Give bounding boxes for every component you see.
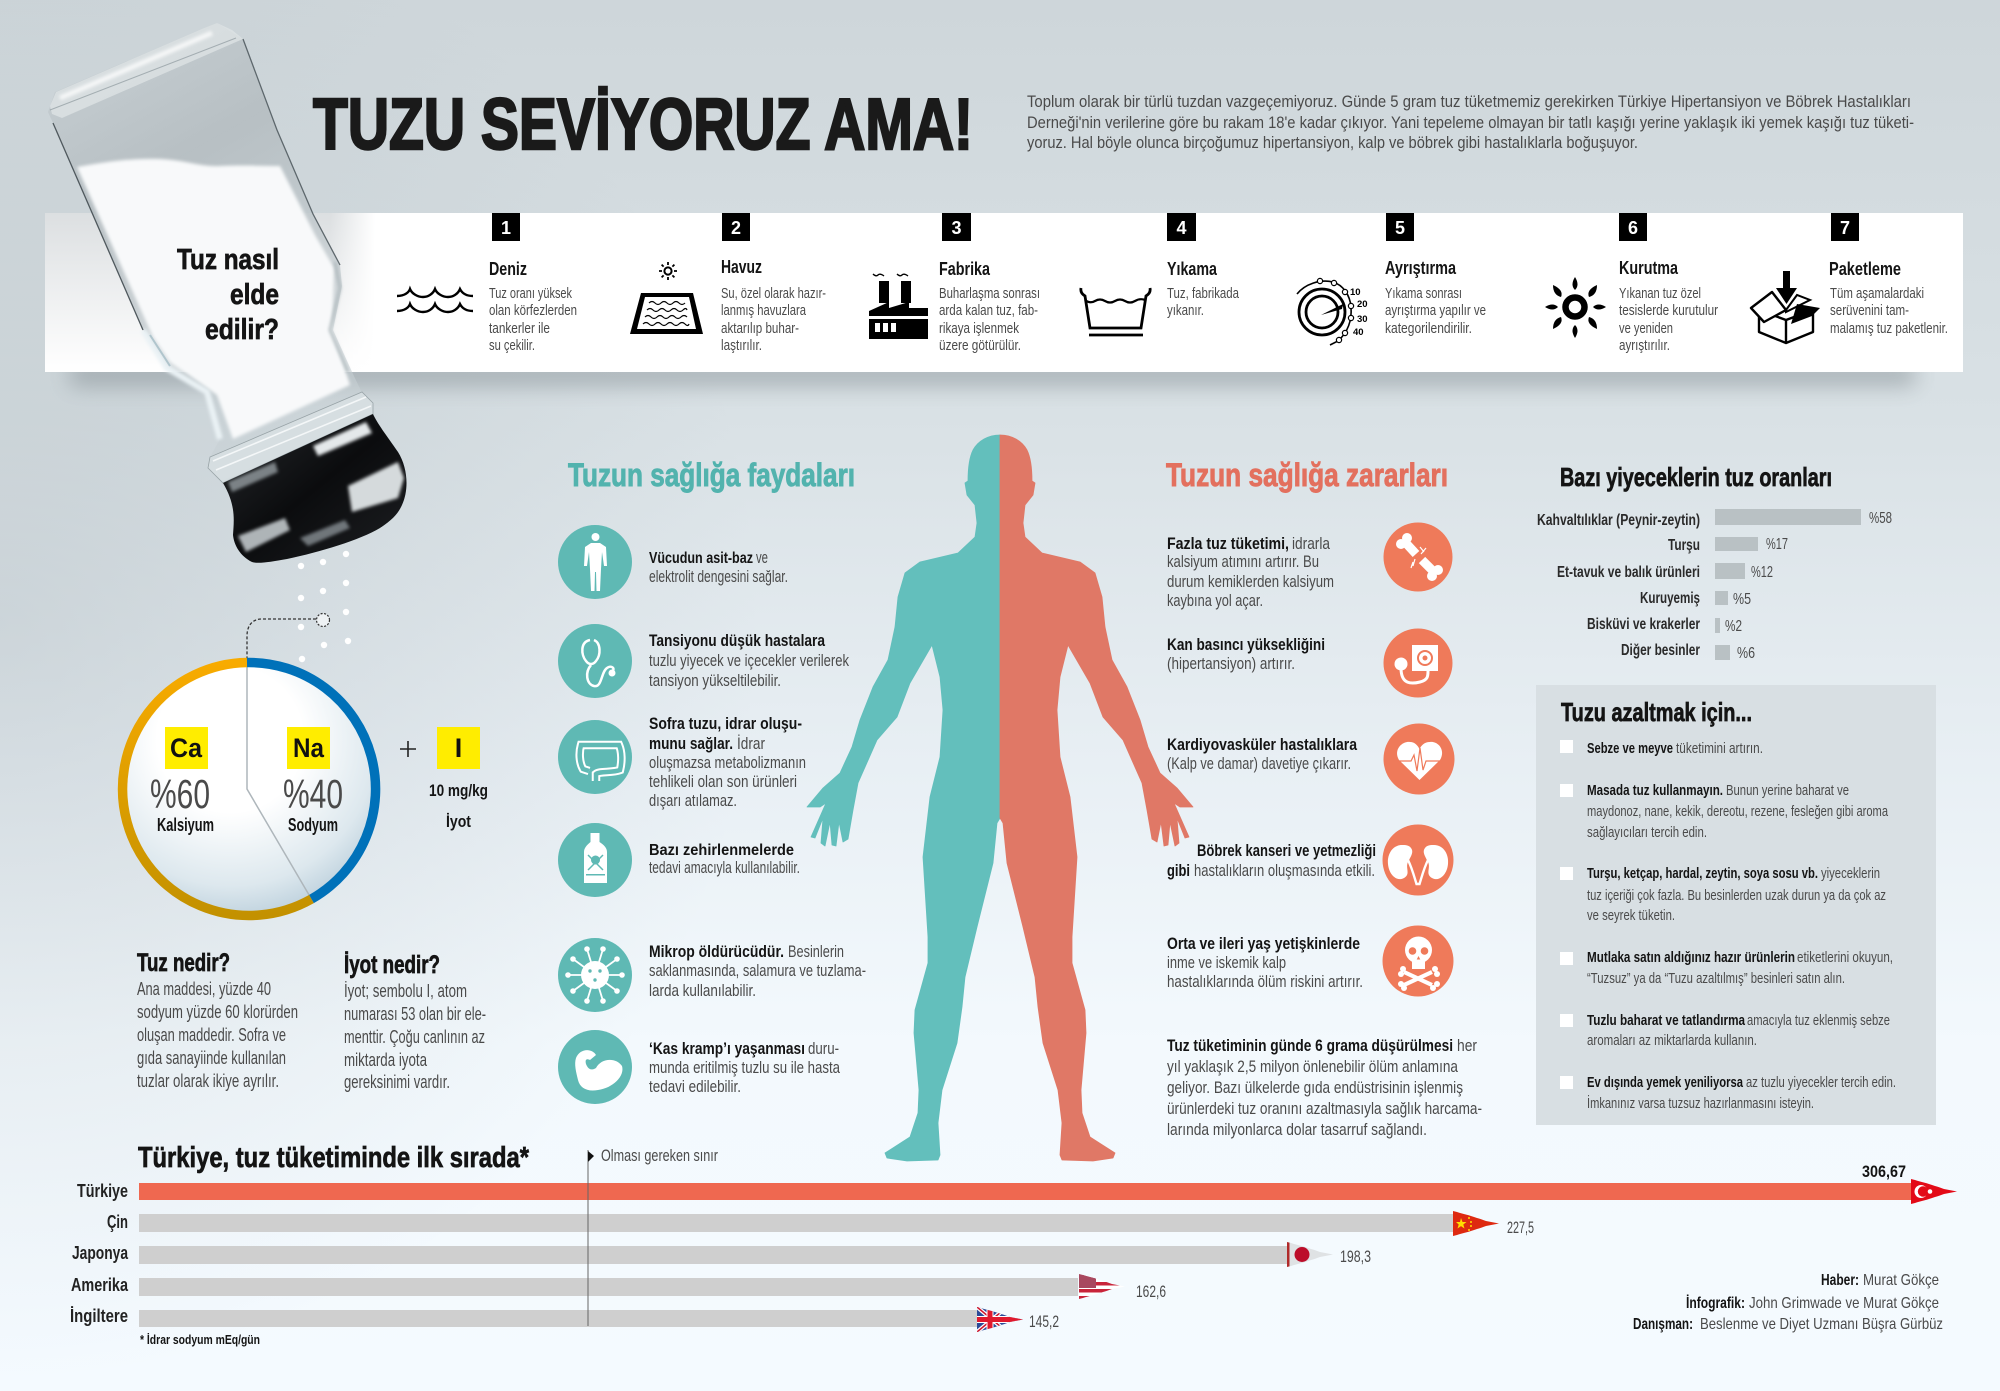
limit marker: Olması gereken sınır <box>601 1146 718 1165</box>
text: tuz nedir: gıda sanayiinde kullanılan <box>137 1048 286 1068</box>
harm 1: calcium loss: Fazla tuz tüketimi, <box>1167 534 1289 553</box>
step 2: havuz <box>630 213 826 354</box>
harm 1: calcium loss <box>1167 522 1452 610</box>
panel: how salt is obtained band <box>45 213 1963 386</box>
harm 4: kidney: Böbrek kanseri ve yetmezliği <box>1197 841 1376 860</box>
harm 4: kidney <box>1167 824 1454 896</box>
harm 2: blood pressure: (hipertansiyon) artırır. <box>1167 654 1295 673</box>
harm 1: calcium loss: kalsiyum atımını artırır. Bu <box>1167 552 1319 571</box>
bar chart: salt ratios of foods <box>1537 462 1892 662</box>
paragraph: reduced salt saves lives: her <box>1457 1036 1477 1055</box>
bar chart: salt ratios of foods: %5 <box>1733 591 1751 608</box>
chart heading: Bazı yiyeceklerin tuz oranları <box>1560 462 1832 492</box>
harm 4: kidney: gibi <box>1167 861 1190 880</box>
calcium label <box>150 727 214 835</box>
step 5: ayristirma: 20 <box>1357 299 1368 310</box>
panel: reduce salt tips: aromaları az miktarlarda kullanın. <box>1587 1032 1757 1049</box>
iodine label <box>400 727 488 831</box>
benefit 4: poisoning: Bazı zehirlenmelerde <box>649 842 794 859</box>
bar chart: salt ratios of foods: %12 <box>1751 564 1773 581</box>
band heading: how is salt obtained: elde <box>230 279 279 311</box>
benefit 5: germ killer: larda kullanılabilir. <box>649 981 756 1000</box>
paragraph: reduced salt saves lives: yıl yaklaşık 2,5 milyon önlenebilir ölüm anlamına <box>1167 1057 1458 1076</box>
iodine label: I <box>455 733 462 763</box>
chart: country salt consumption: Türkiye <box>77 1181 128 1201</box>
bar chart: salt ratios of foods: Turşu <box>1668 537 1700 554</box>
panel: reduce salt tips: amacıyla tuz eklenmiş sebze <box>1747 1012 1890 1029</box>
salt <box>77 159 350 439</box>
band heading: how is salt obtained: Tuz nasıl <box>177 244 279 276</box>
panel: reduce salt tips: ve seyrek tüketin. <box>1587 907 1675 924</box>
credits: John Grimwade ve Murat Gökçe <box>1749 1295 1939 1312</box>
step 1: deniz: tankerler ile <box>489 320 550 337</box>
step 5: ayristirma: 40 <box>1353 327 1364 338</box>
benefit 3: urine formation: İdrar <box>737 734 765 753</box>
values: 227,5 <box>1507 1218 1534 1237</box>
credits <box>1633 1272 1943 1333</box>
step 3: fabrika: Fabrika <box>939 259 991 279</box>
panel: reduce salt tips: Tuzlu baharat ve tatlandırma <box>1587 1012 1746 1029</box>
bar chart: salt ratios of foods: Kahvaltılıklar (Peynir-zeytin) <box>1537 512 1700 529</box>
text: tuz nedir: Tuz nedir? <box>137 949 230 977</box>
benefit 1: acid base balance: Vücudun asit-baz <box>649 550 753 567</box>
step 4: yikama: yıkanır. <box>1167 302 1204 319</box>
text: iyot nedir <box>344 951 486 1092</box>
step 2: havuz: 2 <box>731 218 741 238</box>
step 3: fabrika <box>869 213 1040 354</box>
paragraph: reduced salt saves lives: ürünlerdeki tuz oranını azaltmasıyla sağlık harcama- <box>1167 1099 1482 1118</box>
benefit 5: germ killer: saklanmasında, salamura ve tuzlama- <box>649 961 866 980</box>
step 5: ayristirma: Ayrıştırma <box>1385 258 1457 278</box>
benefit 1: acid base balance <box>558 525 788 599</box>
harm 5: skull: Orta ve ileri yaş yetişkinlerde <box>1167 934 1360 953</box>
step 2: havuz: aktarılıp buhar- <box>721 320 799 337</box>
step 5: ayristirma: 10 <box>1350 287 1361 298</box>
sodium label: Sodyum <box>288 815 338 835</box>
credits: Beslenme ve Diyet Uzmanı Büşra Gürbüz <box>1700 1316 1943 1333</box>
text: iyot nedir: gereksinimi vardır. <box>344 1072 450 1092</box>
step 4: yikama: Tuz, fabrikada <box>1167 285 1239 302</box>
step 6: kurutma: tesislerde kurutulur <box>1619 302 1718 319</box>
rim <box>50 23 243 118</box>
benefit 3: urine formation: munu sağlar. <box>649 734 733 753</box>
paragraph: reduced salt saves lives: geliyor. Bazı ülkelerde gıda endüstrisinin işlenmiş <box>1167 1078 1463 1097</box>
sodium label <box>283 727 343 835</box>
panel: reduce salt tips: yiyeceklerin <box>1821 865 1880 882</box>
step 4: yikama <box>1081 213 1239 335</box>
harm 5: skull <box>1167 926 1454 996</box>
chart: country salt consumption: Çin <box>107 1212 128 1232</box>
harm 5: skull: hastalıklarında ölüm riskini artırır. <box>1167 972 1363 991</box>
panel: reduce salt tips: Ev dışında yemek yeniliyorsa <box>1587 1074 1743 1091</box>
panel: reduce salt tips: tüketimini artırın. <box>1676 740 1763 757</box>
panel: reduce salt tips: Turşu, ketçap, hardal, zeytin, soya sosu vb. <box>1587 865 1818 882</box>
step 1: deniz <box>397 213 577 354</box>
panel: reduce salt tips <box>1536 685 1936 1125</box>
flag: uk <box>977 1307 1023 1332</box>
iodine label: 10 mg/kg <box>429 781 488 800</box>
iodine label: İyot <box>446 812 471 831</box>
panel: reduce salt tips: tuz içeriği çok fazla. Bu besinlerden uzak durun ya da çok az <box>1587 887 1886 904</box>
text: iyot nedir: İyot; sembolu I, atom <box>344 981 467 1001</box>
panel: reduce salt tips: “Tuzsuz” ya da “Tuzu azaltılmış” besinleri satın alın. <box>1587 970 1845 987</box>
glass body <box>48 23 373 483</box>
step 3: fabrika: üzere götürülür. <box>939 337 1021 354</box>
text: tuz nedir: tuzlar olarak ikiye ayrılır. <box>137 1071 279 1091</box>
bar chart: salt ratios of foods: %6 <box>1737 645 1755 662</box>
step 2: havuz: Havuz <box>721 257 762 277</box>
step 6: kurutma: ayrıştırılır. <box>1619 337 1670 354</box>
benefit 6: muscle cramp: tedavi edilebilir. <box>649 1077 741 1096</box>
harm 2: blood pressure: Kan basıncı yüksekliğini <box>1167 635 1325 654</box>
calcium label: Ca <box>170 733 203 763</box>
limit marker <box>588 1146 718 1326</box>
step 1: deniz: Tuz oranı yüksek <box>489 285 572 302</box>
panel: reduce salt tips: Masada tuz kullanmayın. <box>1587 782 1723 799</box>
benefit 4: poisoning <box>558 823 800 897</box>
step 5: ayristirma: Yıkama sonrası <box>1385 285 1462 302</box>
step 1: deniz: 1 <box>501 218 511 238</box>
harm 3: cardiovascular <box>1167 724 1454 794</box>
right half coral <box>1000 435 1193 1161</box>
step 2: havuz: laştırılır. <box>721 337 762 354</box>
step 3: fabrika: rikaya işlenmek <box>939 320 1019 337</box>
calcium label: %60 <box>150 771 210 817</box>
harm 2: blood pressure <box>1167 628 1452 698</box>
panel: reduce salt tips: Bunun yerine baharat ve <box>1726 782 1849 799</box>
harm 1: calcium loss: kaybına yol açar. <box>1167 591 1263 610</box>
benefit 1: acid base balance: elektrolit dengesini sağlar. <box>649 567 788 586</box>
sodium arc <box>247 662 376 899</box>
values: 145,2 <box>1029 1312 1059 1331</box>
flag: china <box>1453 1211 1499 1236</box>
flag: turkey <box>1911 1179 1957 1204</box>
band heading: how is salt obtained: edilir? <box>205 314 279 346</box>
benefit 6: muscle cramp: munda eritilmiş tuzlu su ile hasta <box>649 1058 840 1077</box>
text: tuz nedir <box>137 949 298 1091</box>
panel: reduce salt tips: Mutlaka satın aldığınız hazır ürünlerin <box>1587 949 1795 966</box>
benefit 3: urine formation: tehlikeli olan son ürünleri <box>649 772 797 791</box>
text: iyot nedir: menttir. Çoğu canlının az <box>344 1027 485 1047</box>
calcium arc <box>123 662 312 915</box>
bar chart: salt ratios of foods: %58 <box>1869 510 1892 527</box>
step 2: havuz: lanmış havuzlara <box>721 302 806 319</box>
panel: reduce salt tips: maydonoz, nane, kekik, dereotu, rezene, fesleğen gibi aroma <box>1587 803 1888 820</box>
text: iyot nedir: miktarda iyota <box>344 1050 428 1070</box>
harm 1: calcium loss: idrarla <box>1292 534 1330 553</box>
benefit 2: low blood pressure <box>558 624 849 698</box>
step 6: kurutma: ve yeniden <box>1619 320 1673 337</box>
harm 3: cardiovascular: (Kalp ve damar) davetiye çıkarır. <box>1167 754 1351 773</box>
credits: Danışman: <box>1633 1316 1693 1333</box>
benefit 6: muscle cramp <box>558 1030 840 1104</box>
step 7: paketleme: serüvenini tam- <box>1830 302 1909 319</box>
flag: usa <box>1079 1274 1125 1299</box>
step 5: ayristirma <box>1297 213 1486 345</box>
footnote: * İdrar sodyum mEq/gün <box>140 1332 260 1347</box>
human body silhouette <box>807 435 1193 1161</box>
step 4: yikama: Yıkama <box>1167 259 1218 279</box>
paragraph: reduced salt saves lives <box>1167 1036 1482 1139</box>
step 7: paketleme: Tüm aşamalardaki <box>1830 285 1924 302</box>
panel: reduce salt tips: etiketlerini okuyun, <box>1797 949 1893 966</box>
step 6: kurutma <box>1545 213 1718 354</box>
bar chart: salt ratios of foods: %2 <box>1725 618 1742 635</box>
bar chart: salt ratios of foods: Bisküvi ve krakerler <box>1587 616 1700 633</box>
benefit 2: low blood pressure: tuzlu yiyecek ve içecekler verilerek <box>649 651 849 670</box>
harm 4: kidney: hastalıkların oluşmasında etkili. <box>1194 861 1375 880</box>
sodium label: %40 <box>283 771 343 817</box>
step 4: yikama: 4 <box>1176 218 1187 238</box>
values: 198,3 <box>1340 1247 1371 1266</box>
band heading: how is salt obtained <box>177 244 279 346</box>
benefit 4: poisoning: tedavi amacıyla kullanılabilir. <box>649 858 800 877</box>
harm 5: skull: inme ve iskemik kalp <box>1167 953 1286 972</box>
bar chart: salt ratios of foods: Diğer besinler <box>1621 642 1700 659</box>
text: iyot nedir: İyot nedir? <box>344 951 440 979</box>
calcium label: Kalsiyum <box>157 815 214 835</box>
heading: harms: Tuzun sağlığa zararları <box>1166 457 1448 493</box>
chart: country salt consumption <box>70 1142 1957 1347</box>
cap <box>223 414 407 563</box>
values: 162,6 <box>1136 1282 1166 1301</box>
bar chart: salt ratios of foods: Kuruyemiş <box>1640 590 1700 607</box>
step 6: kurutma: Yıkanan tuz özel <box>1619 285 1701 302</box>
benefit 3: urine formation: Sofra tuzu, idrar oluşu- <box>649 714 802 733</box>
benefit 6: muscle cramp: ‘Kas kramp’ı yaşanması <box>649 1039 805 1058</box>
benefit 3: urine formation: dışarı atılamaz. <box>649 791 737 810</box>
salt shaker bottle <box>48 23 407 563</box>
step 7: paketleme: malamış tuz paketlenir. <box>1830 320 1948 337</box>
benefit 6: muscle cramp: duru- <box>808 1039 839 1058</box>
credits: Haber: <box>1821 1272 1859 1289</box>
step 5: ayristirma: ayrıştırma yapılır ve <box>1385 302 1486 319</box>
paragraph: reduced salt saves lives: Tuz tüketiminin günde 6 grama düşürülmesi <box>1167 1036 1453 1055</box>
text: tuz nedir: oluşan maddedir. Sofra ve <box>137 1025 286 1045</box>
values <box>1029 1162 1906 1331</box>
step 1: deniz: olan körfezlerden <box>489 302 577 319</box>
benefit 5: germ killer: Besinlerin <box>788 942 844 961</box>
text: tuz nedir: sodyum yüzde 60 klorürden <box>137 1002 298 1022</box>
paragraph: reduced salt saves lives: larında milyonlarca dolar tasarruf sağlandı. <box>1167 1120 1427 1139</box>
text: iyot nedir: numarası 53 olan bir ele- <box>344 1004 486 1024</box>
step 6: kurutma: 6 <box>1628 218 1638 238</box>
panel: reduce salt tips: az tuzlu yiyecekler tercih edin. <box>1746 1074 1896 1091</box>
panel: reduce salt tips: İmkanınız varsa tuzsuz hazırlanmasını isteyin. <box>1587 1094 1814 1112</box>
benefit 2: low blood pressure: Tansiyonu düşük hastalara <box>649 631 825 650</box>
credits: İnfografik: <box>1686 1294 1745 1312</box>
harm 1: calcium loss: durum kemiklerden kalsiyum <box>1167 572 1334 591</box>
text: tuz nedir: Ana maddesi, yüzde 40 <box>137 979 271 999</box>
step 1: deniz: Deniz <box>489 259 527 279</box>
values: 306,67 <box>1862 1162 1906 1181</box>
title: TUZU SEVİYORUZ AMA! <box>313 85 973 165</box>
panel: reduce salt tips: sağlayıcıları tercih edin. <box>1587 824 1707 841</box>
step 6: kurutma: Kurutma <box>1619 258 1679 278</box>
step 7: paketleme: 7 <box>1840 218 1850 238</box>
intro text: yoruz. Hal böyle olunca birçoğumuz hipertansiyon, kalp ve böbrek gibi hastalıklarla boğuşuyor. <box>1027 133 1638 152</box>
harm 3: cardiovascular: Kardiyovasküler hastalıklara <box>1167 735 1357 754</box>
panel heading: Tuzu azaltmak için... <box>1561 697 1752 727</box>
benefit 2: low blood pressure: tansiyon yükseltilebilir. <box>649 671 781 690</box>
benefit 5: germ killer <box>558 938 866 1012</box>
benefit 3: urine formation <box>558 714 806 810</box>
chart heading: Türkiye, tuz tüketiminde ilk sırada* <box>138 1142 530 1174</box>
bar chart: salt ratios of foods: %17 <box>1766 536 1788 553</box>
step 3: fabrika: Buharlaşma sonrası <box>939 285 1040 302</box>
neck <box>208 392 373 483</box>
chart: country salt consumption: Amerika <box>71 1275 129 1295</box>
flag: japan <box>1287 1242 1333 1267</box>
left half teal <box>807 435 1000 1161</box>
step 7: paketleme <box>1751 213 1948 343</box>
credits: Murat Gökçe <box>1863 1272 1939 1289</box>
step 5: ayristirma: kategorilendirilir. <box>1385 320 1472 337</box>
step 3: fabrika: 3 <box>951 218 962 238</box>
step 7: paketleme: Paketleme <box>1829 259 1901 279</box>
heading: benefits: Tuzun sağlığa faydaları <box>568 457 855 493</box>
step 5: ayristirma: 5 <box>1395 218 1405 238</box>
step 1: deniz: su çekilir. <box>489 337 535 354</box>
salt composition pie <box>123 614 376 915</box>
falling salt dots <box>298 551 351 662</box>
benefit 5: germ killer: Mikrop öldürücüdür. <box>649 942 784 961</box>
step 3: fabrika: arda kalan tuz, fab- <box>939 302 1038 319</box>
chart: country salt consumption: İngiltere <box>70 1306 128 1326</box>
step 2: havuz: Su, özel olarak hazır- <box>721 285 826 302</box>
sodium label: Na <box>293 733 325 763</box>
chart: country salt consumption: Japonya <box>72 1243 129 1263</box>
step 5: ayristirma: 30 <box>1357 314 1368 325</box>
bar chart: salt ratios of foods: Et-tavuk ve balık ürünleri <box>1557 564 1700 581</box>
intro text <box>1027 92 1914 152</box>
panel: reduce salt tips: Sebze ve meyve <box>1587 740 1673 757</box>
benefit 3: urine formation: oluşmazsa metabolizmanın <box>649 753 806 772</box>
benefit 1: acid base balance: ve <box>756 548 768 567</box>
